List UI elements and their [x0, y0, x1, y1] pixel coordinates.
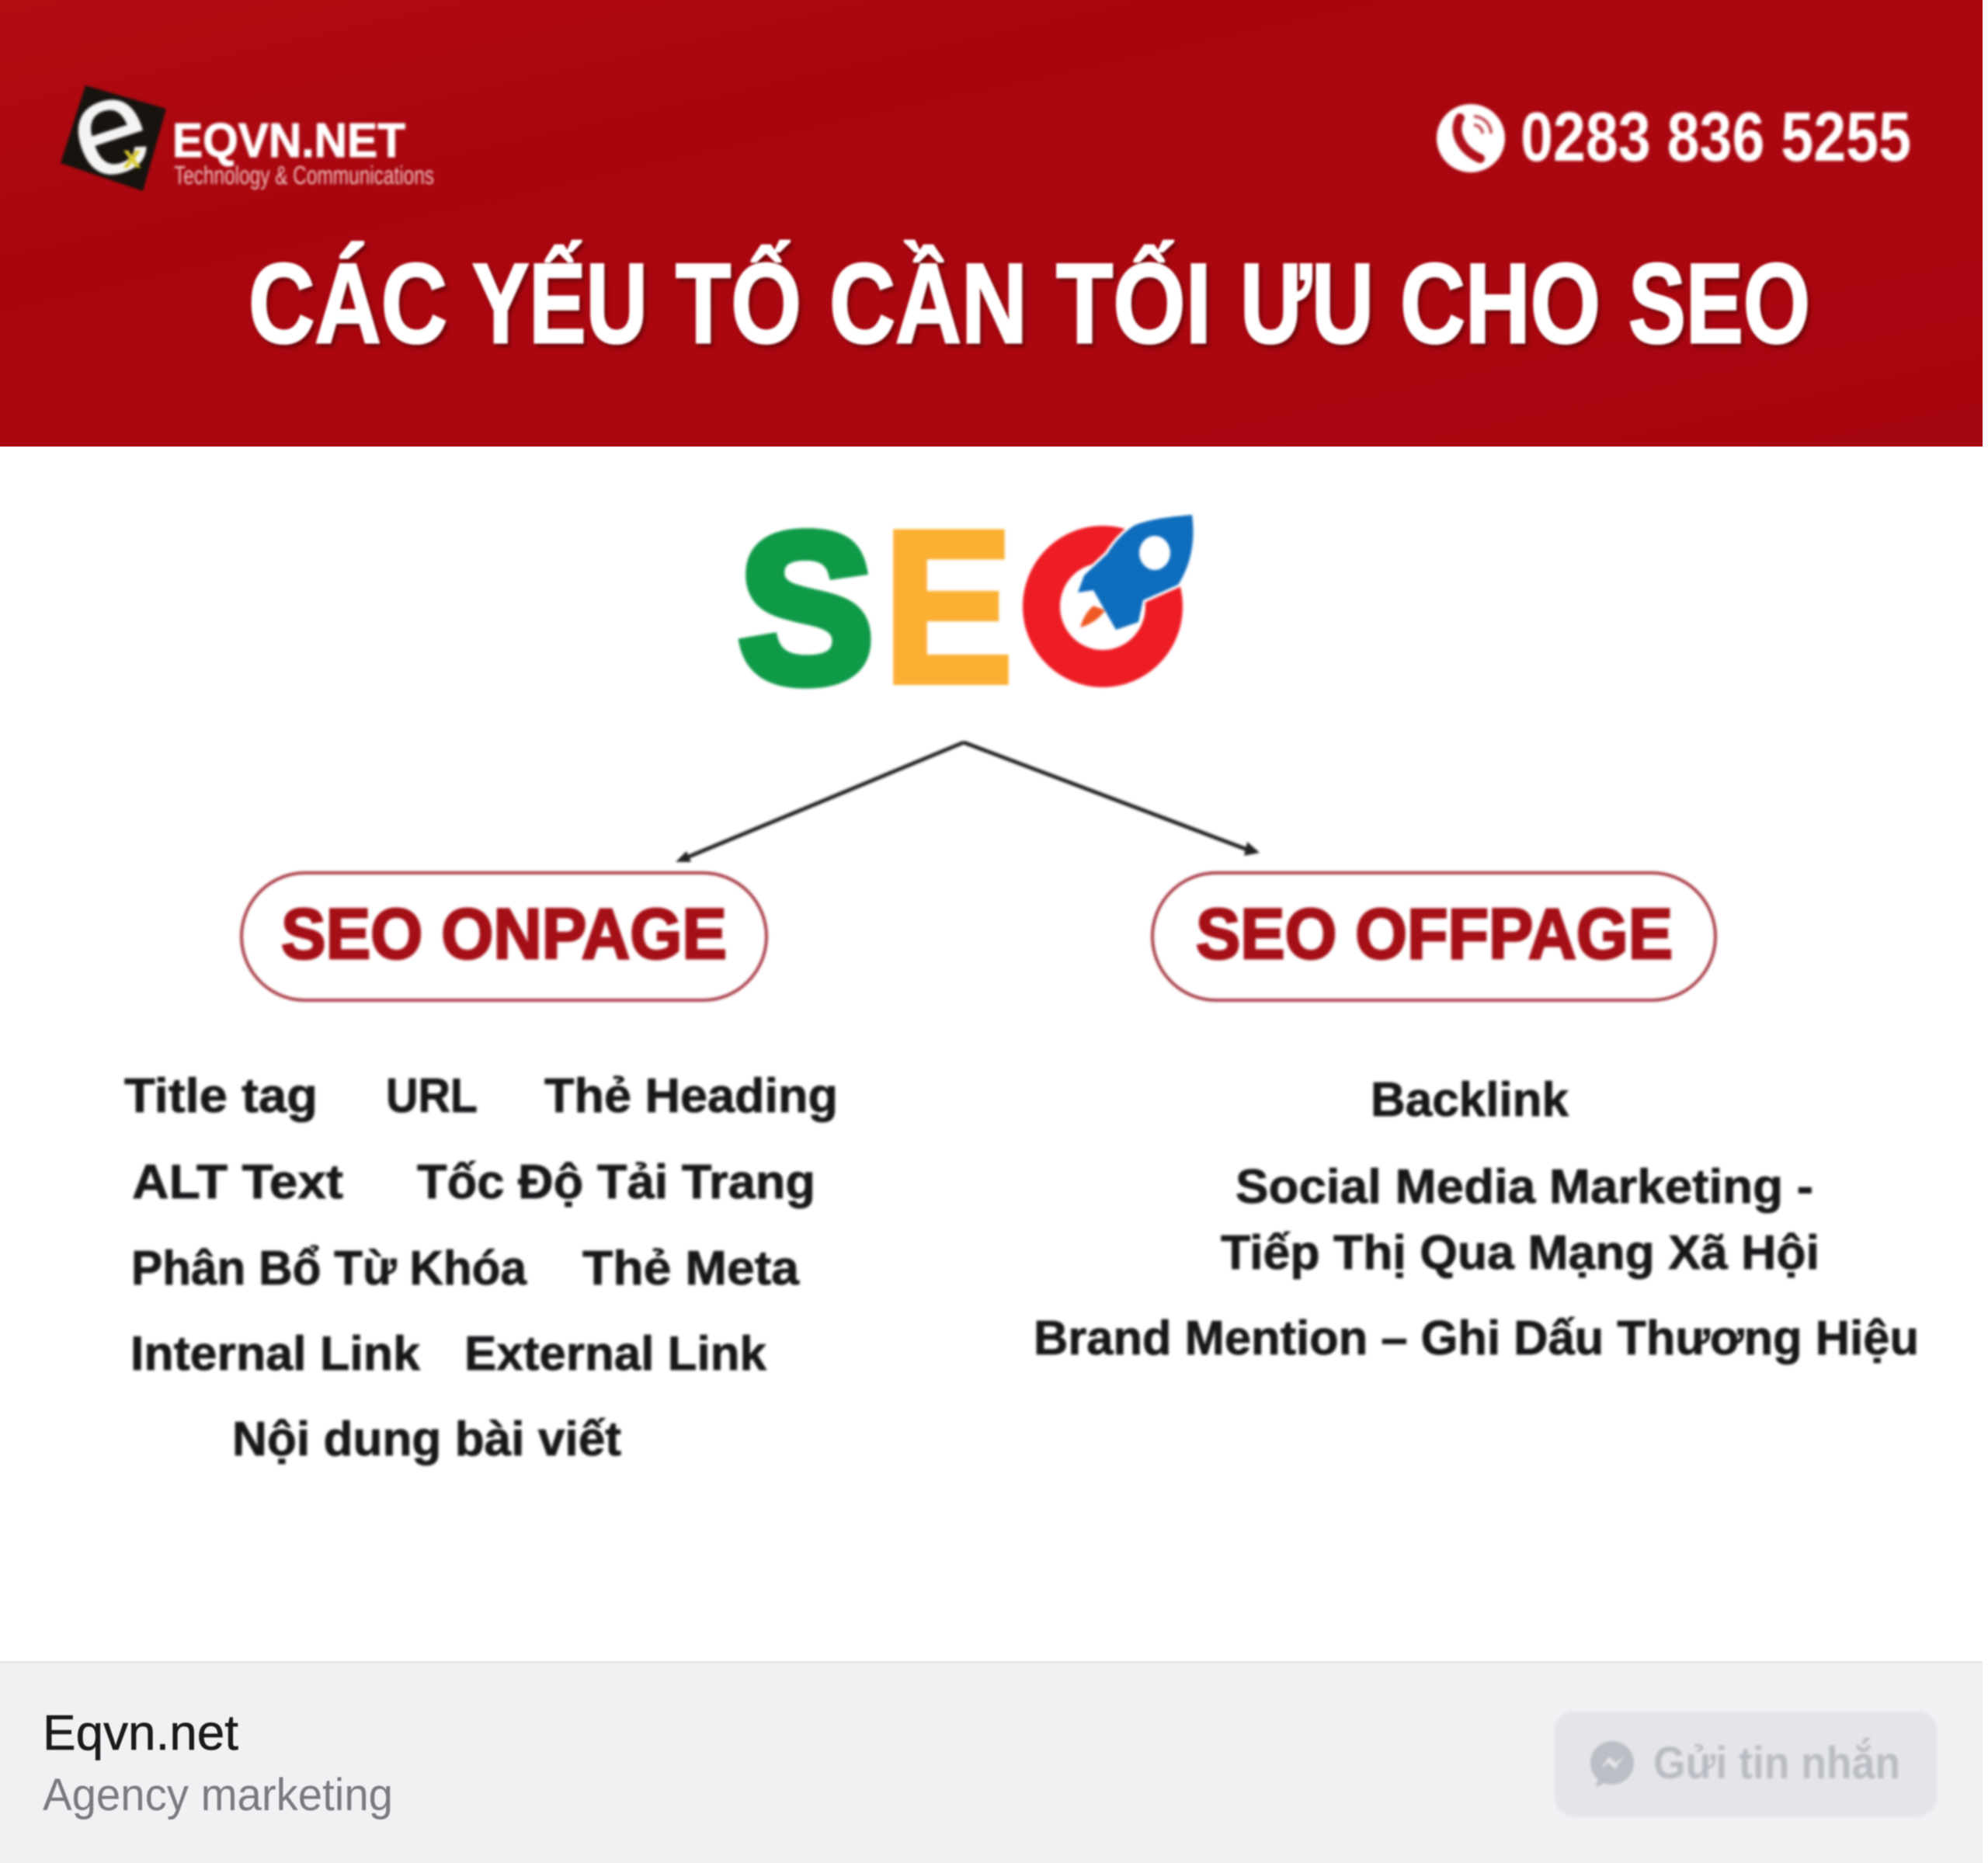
list: SEO offpage factors: Social Media Marketing - [1236, 1160, 1813, 1214]
panel: red header [0, 0, 1983, 447]
title: SEO [1628, 240, 1810, 367]
button: send message [1555, 1712, 1937, 1816]
title [248, 240, 1810, 367]
phone contact [1437, 99, 1911, 176]
list: SEO onpage factors: URL [386, 1069, 478, 1123]
list: SEO onpage factors: External Link [464, 1327, 767, 1381]
list: SEO onpage factors: Internal Link [130, 1327, 421, 1381]
title: YẾU [472, 240, 648, 367]
page name: Eqvn.net [43, 1705, 238, 1760]
icon: rocket [1078, 515, 1193, 630]
list: SEO onpage factors: Title tag [124, 1069, 318, 1123]
letter E: E [883, 486, 1013, 728]
panel: SEO offpage pill: SEO OFFPAGE [1196, 895, 1673, 974]
icon: messenger [1590, 1741, 1634, 1788]
logo name: EQVN.NET [172, 114, 405, 168]
logo tagline: Technology & Communications [174, 161, 434, 189]
page category: Agency marketing [43, 1770, 393, 1820]
panel: SEO onpage pill [242, 873, 766, 1000]
title: TỐI [1056, 240, 1211, 367]
title: CÁC [248, 240, 447, 367]
arrow to SEO onpage [676, 742, 964, 862]
panel: page footer [0, 1661, 1983, 1863]
panel: SEO offpage pill [1152, 873, 1715, 1000]
list: SEO onpage factors: Phân Bổ Từ Khóa [131, 1242, 527, 1295]
icon: black diamond with e mark: x [123, 138, 141, 175]
list: SEO offpage factors [1034, 1073, 1919, 1365]
arrow to SEO offpage [964, 742, 1260, 856]
title: TỐ [676, 240, 801, 367]
list: SEO offpage factors: Tiếp Thị Qua Mạng Xã Hội [1221, 1226, 1819, 1280]
title: CHO [1400, 240, 1600, 367]
icon: black diamond with e mark: e [50, 45, 167, 210]
letter S: S [739, 490, 874, 726]
letter O [1041, 544, 1164, 669]
list: SEO onpage factors: ALT Text [132, 1156, 343, 1209]
logo: EQVN.NET [50, 45, 434, 210]
logo: SEO with rocket [739, 486, 1193, 728]
list: SEO onpage factors: Tốc Độ Tải Trang [417, 1156, 815, 1209]
list: SEO onpage factors: Thẻ Heading [544, 1069, 838, 1123]
button label: Gửi tin nhắn [1653, 1738, 1900, 1788]
panel: SEO onpage pill: SEO ONPAGE [281, 895, 727, 974]
list: SEO onpage factors: Nội dung bài viết [232, 1413, 621, 1466]
list: SEO offpage factors: Backlink [1371, 1073, 1569, 1127]
list: SEO onpage factors: Thẻ Meta [582, 1242, 800, 1295]
arrows from SEO [676, 742, 1260, 862]
title: CẦN [829, 240, 1027, 367]
title: ƯU [1240, 240, 1374, 367]
list: SEO offpage factors: Brand Mention – Ghi Dấu Thương Hiệu [1034, 1312, 1919, 1365]
list: SEO onpage factors [124, 1069, 838, 1466]
icon: phone [1437, 104, 1505, 172]
phone number: 0283 836 5255 [1521, 99, 1911, 176]
